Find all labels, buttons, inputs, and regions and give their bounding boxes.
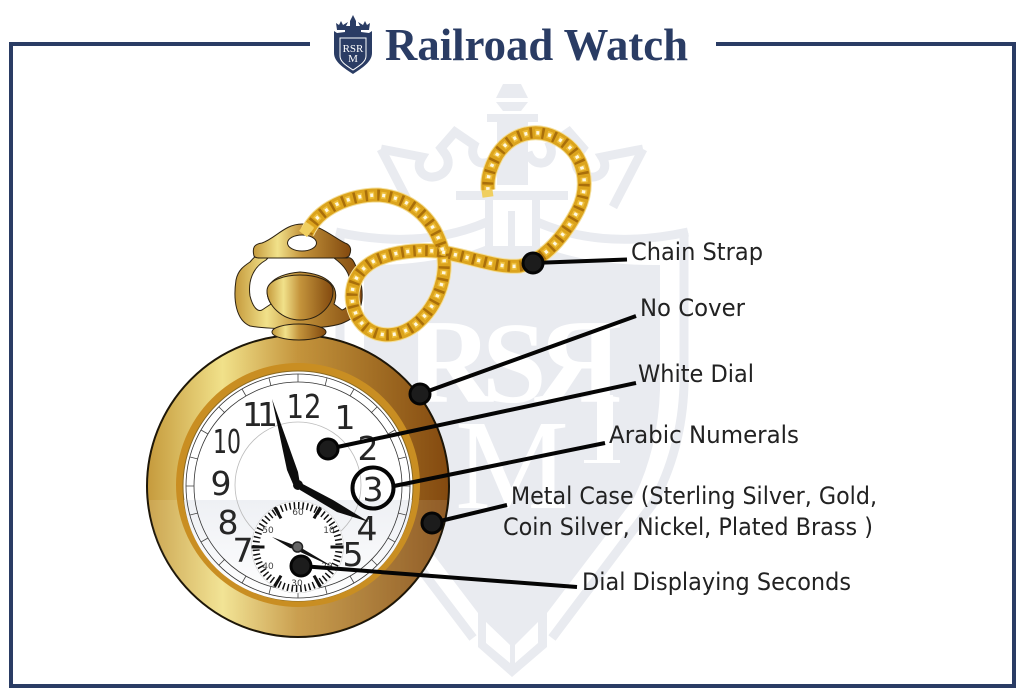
label: metal case: Metal Case (Sterling Silver, Gold, — [511, 482, 877, 510]
watermark monogram: R — [534, 295, 622, 428]
seconds subdial: 10 — [323, 526, 335, 536]
dial numerals: 2 — [358, 429, 378, 468]
seconds subdial: 40 — [262, 562, 274, 572]
dial numerals: 5 — [342, 535, 364, 574]
watermark crown — [381, 132, 643, 207]
watermark shield — [336, 84, 688, 677]
label: metal case — [503, 482, 877, 541]
dial numerals: 9 — [210, 464, 232, 503]
dial numerals: 12 — [286, 387, 322, 426]
watch case — [147, 335, 449, 637]
header logo: RSR — [343, 43, 364, 55]
dial numerals: 7 — [232, 531, 254, 570]
chain strap — [303, 133, 584, 335]
callout circle: numeral 3 — [352, 468, 394, 508]
seconds subdial — [252, 501, 344, 593]
dial numerals: 8 — [218, 503, 238, 542]
dial numerals — [210, 387, 384, 574]
label: dial displaying seconds: Dial Displaying Seconds — [582, 568, 851, 596]
seconds hand — [272, 537, 335, 568]
watermark monogram: M — [455, 394, 569, 536]
watermark shield outline — [336, 222, 688, 638]
header logo — [334, 15, 372, 74]
watermark shield body — [364, 246, 660, 677]
seconds subdial: 60 — [292, 508, 304, 518]
title: Railroad Watch — [385, 19, 688, 70]
minute track ticks — [186, 374, 410, 598]
leader lines — [301, 260, 636, 587]
label: white dial: White Dial — [638, 360, 754, 388]
dial numerals: 10 — [213, 422, 241, 461]
watermark monogram: S — [482, 300, 547, 428]
watermark sword — [456, 84, 568, 250]
dial numerals: 4 — [356, 509, 378, 548]
watermark monogram: R — [406, 295, 494, 428]
dial numerals: 11 — [242, 395, 278, 434]
label: chain strap: Chain Strap — [631, 238, 763, 266]
label: metal case: Coin Silver, Nickel, Plated Brass ) — [503, 513, 873, 541]
seconds subdial: 50 — [262, 526, 274, 536]
hour and minute hands — [272, 399, 369, 522]
seconds subdial: 30 — [291, 579, 303, 589]
dial numerals: 3 — [362, 470, 384, 509]
callout dots — [291, 253, 543, 576]
dial numerals: 1 — [334, 398, 356, 437]
label: no cover: No Cover — [640, 294, 745, 322]
header logo: M — [348, 53, 358, 65]
seconds subdial: 20 — [321, 562, 333, 572]
watch bow — [235, 224, 362, 329]
watermark monogram — [404, 295, 622, 536]
label: arabic numerals: Arabic Numerals — [609, 421, 799, 449]
watch stem — [272, 324, 326, 340]
white dial — [183, 371, 413, 601]
